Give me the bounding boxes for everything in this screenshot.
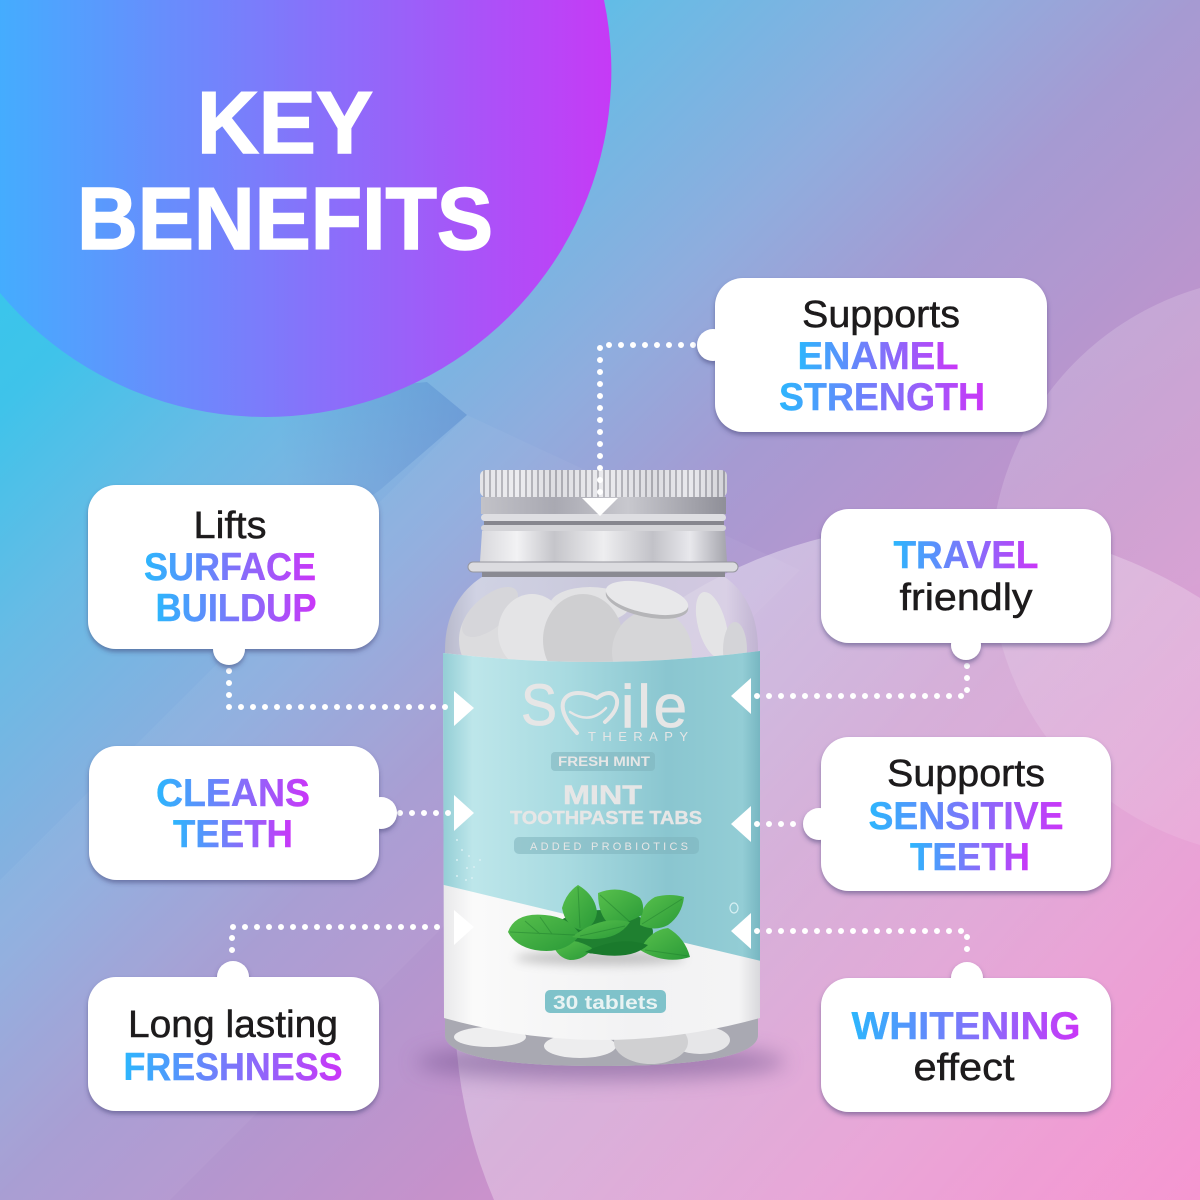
mint veins [510, 887, 688, 956]
card: whitening: WHITENING [852, 1005, 1080, 1048]
card: freshness: FRESHNESS [124, 1046, 342, 1089]
card: freshness [88, 961, 379, 1111]
connector: freshness [232, 910, 474, 952]
card: freshness: Long lasting [128, 1004, 338, 1046]
connector: whitening [731, 913, 967, 953]
connector: surface buildup [229, 671, 474, 726]
tablets [445, 575, 758, 1070]
label branding: MINT [563, 780, 643, 810]
card: sensitive teeth [803, 737, 1111, 891]
card: enamel strength: Supports [802, 294, 960, 336]
card: enamel strength: STRENGTH [779, 376, 985, 419]
title: KEY [197, 73, 373, 172]
card: sensitive teeth: Supports [887, 753, 1045, 795]
card: cleans teeth [89, 746, 397, 880]
card: whitening [821, 962, 1111, 1112]
card: enamel strength [697, 278, 1047, 432]
card: surface buildup: SURFACE [144, 546, 316, 589]
card: enamel strength: ENAMEL [798, 335, 958, 378]
card: cleans teeth: TEETH [173, 813, 293, 856]
label branding: ADDED PROBIOTICS [530, 841, 688, 853]
card: whitening: effect [914, 1047, 1015, 1089]
mint leaves [508, 885, 690, 960]
label branding [510, 673, 702, 1014]
connector: cleans teeth [400, 795, 474, 831]
label branding: ile [621, 673, 687, 740]
card: sensitive teeth: TEETH [910, 836, 1030, 879]
card: travel friendly [821, 509, 1111, 660]
card: sensitive teeth: SENSITIVE [868, 795, 1064, 838]
title: BENEFITS [77, 169, 493, 268]
label branding: 30 tablets [553, 993, 658, 1014]
bottle [440, 470, 765, 1070]
card: travel friendly: TRAVEL [894, 534, 1038, 577]
connector: travel friendly [731, 666, 967, 714]
card: cleans teeth: CLEANS [156, 772, 310, 815]
card: surface buildup: BUILDUP [156, 587, 316, 630]
connector: enamel strength [582, 345, 693, 516]
card: travel friendly: friendly [900, 577, 1032, 619]
card: surface buildup: Lifts [194, 505, 266, 547]
bottle cap [468, 470, 738, 577]
label branding: S [521, 673, 557, 738]
title circle [0, 0, 611, 417]
label [443, 651, 760, 1040]
connector: sensitive teeth [731, 806, 795, 842]
glass jar [445, 575, 758, 1066]
card: surface buildup [88, 485, 379, 665]
mint shadow [515, 951, 685, 965]
label branding: THERAPY [588, 729, 688, 744]
decorative label dots [457, 840, 480, 880]
bottle shadow [416, 1044, 786, 1080]
label branding: TOOTHPASTE TABS [510, 808, 702, 828]
decorative label ring [730, 903, 738, 913]
title [77, 73, 493, 268]
label branding: FRESH MINT [558, 754, 651, 769]
